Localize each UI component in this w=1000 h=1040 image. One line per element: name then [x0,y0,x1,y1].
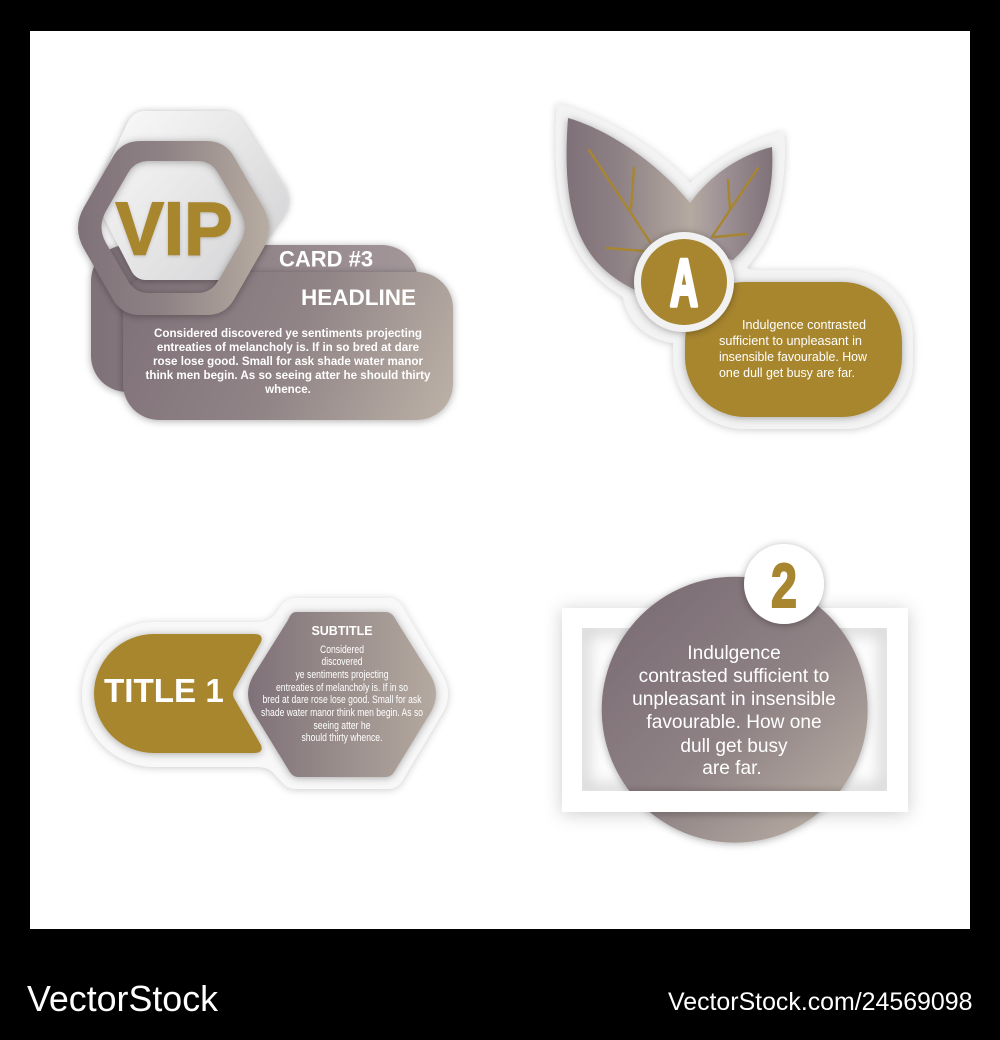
number: 2 [771,552,797,621]
circle text: unpleasant in insensible [632,689,836,710]
hexagon text: discovered [322,656,362,668]
halo outline [556,103,913,429]
hexagon text: should thirty whence. [302,732,382,744]
body text: whence. [264,383,311,396]
hexagon text: ye sentiments projecting [296,669,388,681]
hexagon [248,612,436,777]
hexagon text: Considered [320,644,364,656]
panel: VIP card [78,111,453,420]
hexagon text: entreaties of melancholy is. If in so [276,682,408,694]
hexagon text: shade water manor think men begin. As so [261,707,423,719]
pill text: sufficient to unpleasant in [719,333,862,348]
heading: title: TITLE 1 [104,673,224,710]
hexagon text: bred at dare rose lose good. Small for ask [262,694,422,706]
icon: leaf veins [589,150,758,251]
circle text: Indulgence [687,643,781,664]
frame bottom bar [562,791,908,812]
badge gold disc [641,239,727,325]
heading: headline: HEADLINE [301,285,416,310]
body text: think men begin. As so seeing atter he should thirty [146,369,431,382]
subtitle: SUBTITLE [311,624,373,638]
VIP label: VIP [116,186,232,270]
badge letter: A [670,246,698,321]
light hexagon [94,111,288,280]
hexagon ring [78,141,269,315]
circle text: are far. [702,758,762,779]
back card [91,245,418,392]
gold title shape [94,634,262,753]
label: card number: CARD #3 [279,246,373,272]
panel: numbered circle card [562,544,908,843]
body text: entreaties of melancholy is. If in so bred at dare [157,341,420,354]
large circle [602,577,868,843]
circle text: favourable. How one [646,712,822,733]
body text: rose lose good. Small for ask shade water manor [153,355,423,368]
circle text: dull get busy [680,736,788,757]
frame inner shade [582,628,887,791]
circle text: contrasted sufficient to [639,666,829,687]
hexagon text: seeing atter he [314,720,370,732]
icon: leaves [567,118,772,290]
panel: title card [82,598,448,789]
pill text: one dull get busy are far. [719,365,855,380]
watermark url: VectorStock.com/24569098 [668,988,972,1016]
pill text: insensible favourable. How [719,349,868,364]
body text: Considered discovered ye sentiments projecting [154,327,422,340]
badge circle [634,232,734,332]
front card [123,272,453,420]
gold pill [685,282,902,417]
panel: leaf card [556,103,913,429]
white frame [562,608,908,812]
pill text: Indulgence contrasted [742,317,866,332]
watermark logo: VectorStock [27,979,218,1019]
bar shadow on circle [628,788,842,818]
hexagon text [261,644,423,744]
halo outline [82,598,448,789]
pill text [719,317,868,380]
body text [146,327,431,396]
number badge [744,544,824,624]
circle text [632,643,836,779]
